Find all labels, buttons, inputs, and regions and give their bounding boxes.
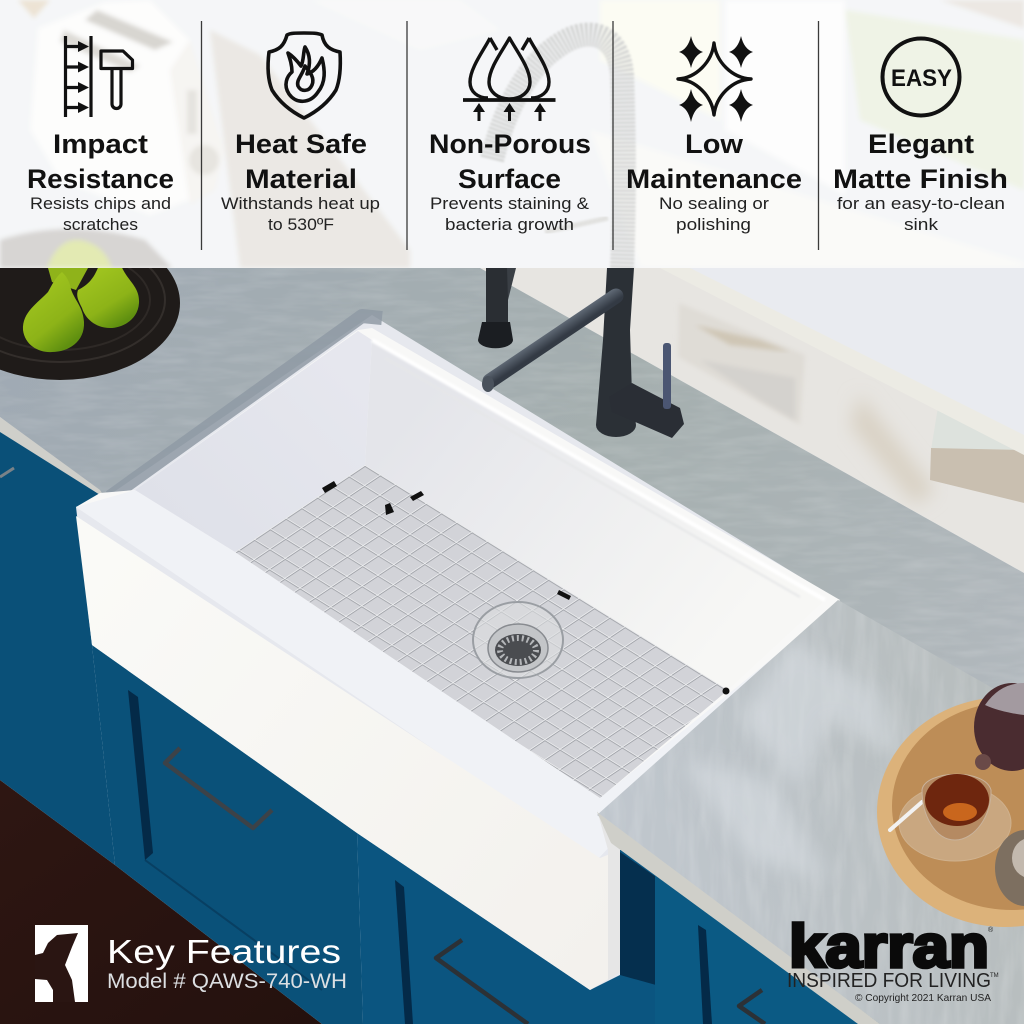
icon: water drops on surface [463, 38, 556, 121]
pull-down spray [476, 190, 492, 233]
feature: low maintenance: Maintenance [626, 164, 802, 194]
key features title: Key Features [107, 933, 341, 970]
feature: heat safe material [221, 33, 380, 234]
feature: elegant matte finish [833, 38, 1008, 234]
plate [0, 229, 172, 268]
rim ridge [372, 340, 825, 600]
faucet handle [609, 383, 684, 438]
feature: non-porous surface [429, 38, 591, 234]
feature: elegant matte finish: Matte Finish [833, 164, 1008, 194]
middle door handle [436, 940, 528, 1024]
heading: Non-Porous [429, 129, 591, 159]
feature: impact resistance: scratches [63, 216, 138, 234]
basin back wall [365, 340, 825, 690]
icon: shield with flame [268, 33, 340, 118]
sink rim [76, 328, 840, 850]
window [600, 0, 720, 120]
diagonal counter shade [210, 30, 410, 268]
cabinets [0, 430, 885, 1024]
left cabinet [0, 430, 115, 865]
faucet arm [490, 296, 616, 381]
coil faucet [492, 35, 624, 268]
karran logo: karran [789, 913, 989, 980]
window sill [640, 268, 1024, 455]
tray with tea set [877, 683, 1024, 927]
door handle [165, 748, 272, 828]
sink apron [76, 516, 620, 990]
icon: easy badge: EASY [891, 65, 952, 92]
second cup [995, 830, 1024, 906]
door panel bevel [145, 860, 322, 990]
pear tops [47, 240, 112, 268]
model number: Model # QAWS-740-WH [107, 970, 347, 993]
heading: Elegant [868, 129, 974, 159]
icon: sparkles [678, 36, 753, 122]
feature: impact resistance: Resistance [27, 164, 174, 194]
feature: heat safe material: Material [245, 164, 357, 194]
description: Prevents staining & [430, 195, 589, 213]
feature: impact resistance [27, 36, 174, 234]
middle door groove [395, 880, 413, 1024]
right counter piece [597, 600, 1024, 1024]
front rim [76, 490, 838, 860]
faucet [482, 268, 684, 438]
heading: Low [685, 129, 744, 159]
description: Withstands heat up [221, 195, 380, 213]
countertop [0, 268, 1024, 1024]
sink [76, 316, 840, 990]
left pear [23, 272, 84, 352]
brand mark [35, 925, 88, 1002]
apron corner [597, 810, 620, 980]
right cabinet door [655, 875, 885, 1024]
heading: Impact [53, 129, 148, 159]
karran logo: ® [988, 926, 994, 934]
right door groove [698, 925, 712, 1024]
teacup [922, 774, 991, 840]
teapot [974, 683, 1024, 771]
top feature band background [0, 0, 1024, 268]
upper left wood [18, 0, 50, 18]
soap dispenser [478, 268, 516, 348]
counter rim shadow [110, 316, 382, 497]
window reflections [696, 648, 892, 873]
karran logo: © Copyright 2021 Karran USA [855, 992, 991, 1004]
feature: non-porous surface: bacteria growth [445, 216, 574, 234]
door groove [128, 690, 153, 860]
sink cabinet door [92, 645, 363, 1024]
left cabinet handle [0, 468, 14, 477]
description: Resists chips and [30, 195, 171, 213]
middle cabinet door [357, 833, 656, 1024]
floor [0, 780, 322, 1024]
feature: non-porous surface: Surface [458, 164, 561, 194]
toaster [55, 6, 184, 198]
description: for an easy-to-clean [837, 195, 1005, 213]
feature: low maintenance [626, 36, 802, 234]
feature: heat safe material: to 530ºF [268, 216, 334, 234]
marble backsplash [480, 268, 1024, 573]
plate with pears [0, 226, 180, 380]
heading: Heat Safe [235, 129, 367, 159]
divider lines [202, 21, 818, 250]
counter front thickness left [0, 417, 105, 498]
white haze [0, 0, 1024, 268]
counter texture [32, 268, 980, 653]
feature: low maintenance: polishing [676, 216, 751, 234]
feature: elegant matte finish: sink [904, 216, 939, 234]
counter right texture [702, 614, 1008, 1024]
saucer [899, 785, 1011, 861]
counter front thickness right [597, 812, 880, 1024]
karran logo [787, 913, 999, 1004]
wire grid [235, 465, 728, 798]
karran logo: INSPIRED FOR LIVING [787, 969, 991, 992]
drain [473, 602, 563, 678]
icon: wall and hammer [66, 36, 132, 117]
rear pear [48, 268, 88, 290]
spoon [890, 802, 922, 830]
icon: easy badge [882, 38, 960, 116]
description: No sealing or [659, 195, 770, 213]
right door handle [739, 990, 765, 1024]
basin left wall [135, 331, 372, 552]
karran logo: TM [990, 973, 999, 979]
right pear [77, 262, 139, 328]
grid bumpers [322, 481, 571, 600]
